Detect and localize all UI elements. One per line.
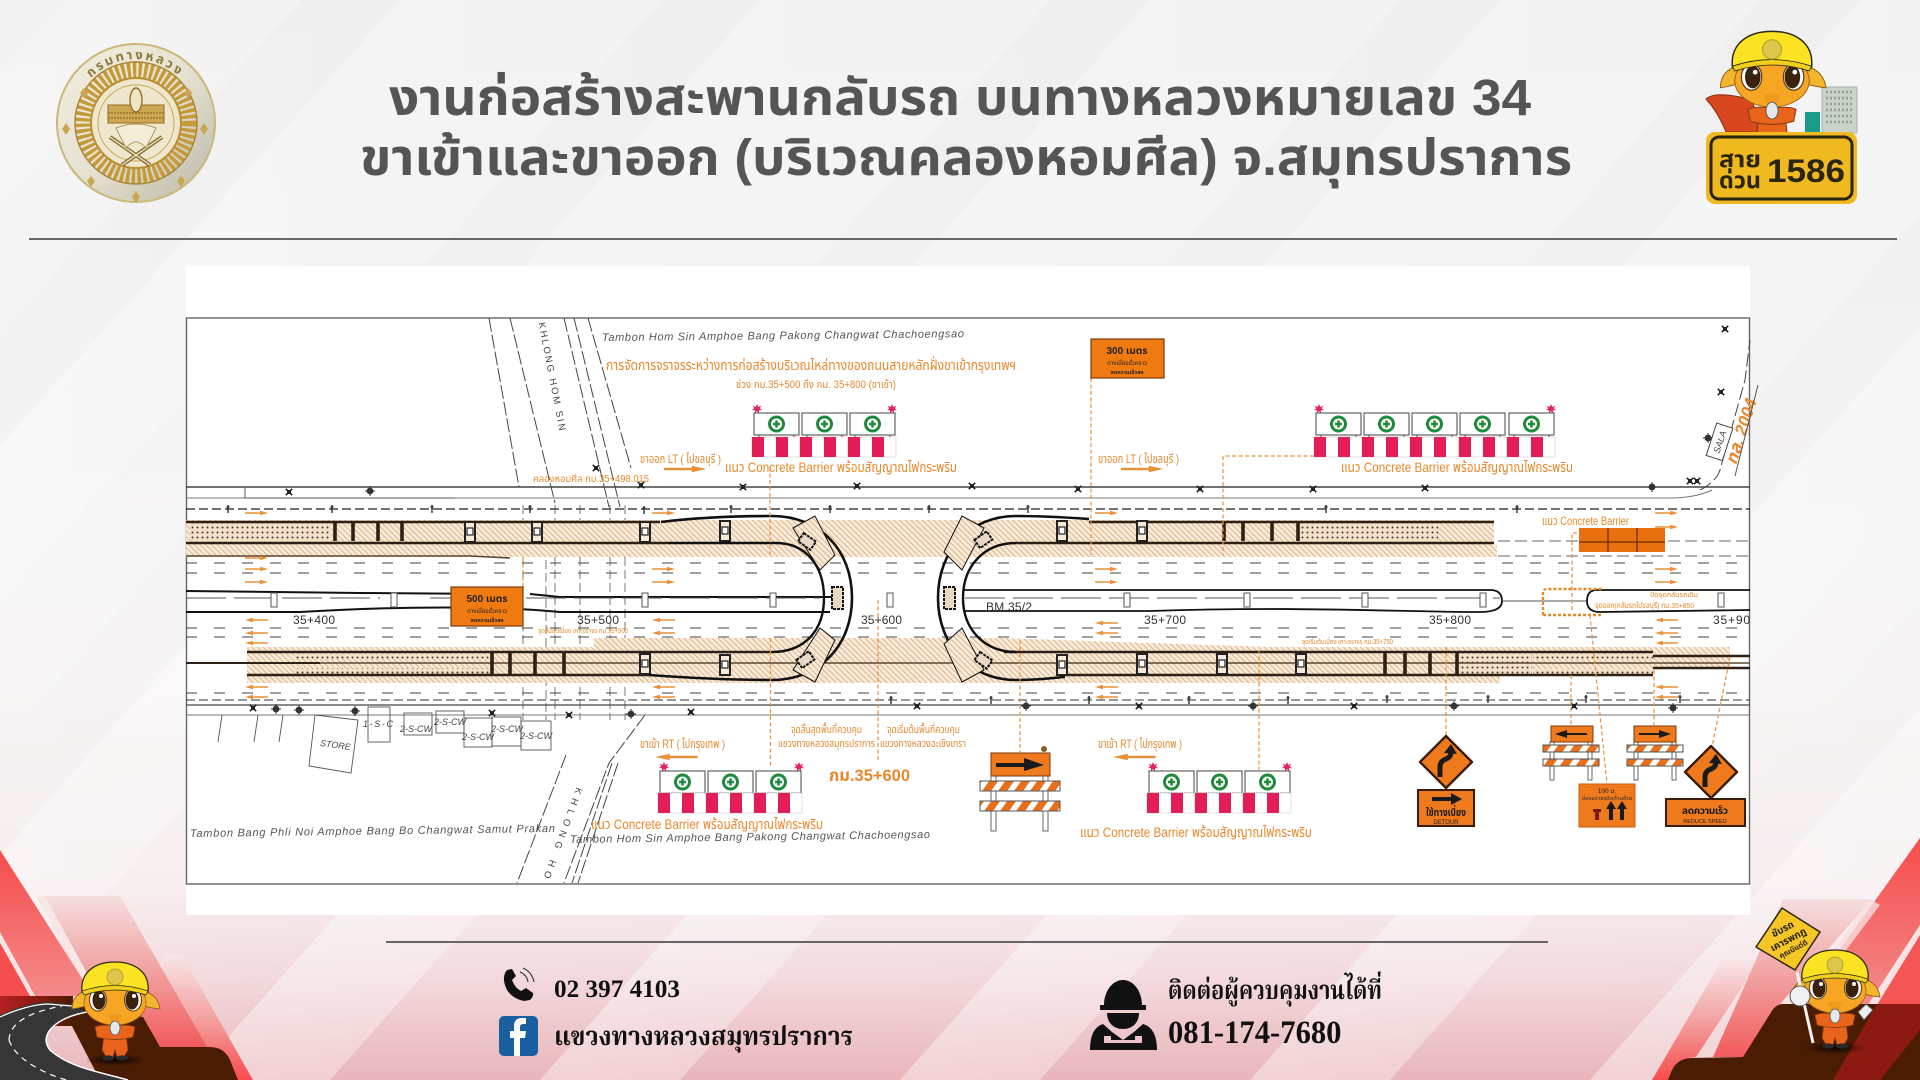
plan labels: 35+600: [861, 613, 902, 627]
SALA and route 2004 label: [1706, 385, 1761, 476]
concrete barrier group D: [1147, 762, 1292, 813]
hotline logo with mascot: สาย: [1719, 146, 1761, 172]
traffic direction arrows: [245, 511, 1678, 699]
sign: 100 m lane closed: ช่องจราจรปิดด้านซ้าย: [1582, 795, 1632, 802]
plan labels: ขาเข้า RT ( ไปกรุงเทพ ): [1098, 737, 1182, 751]
plan labels: การจัดการจราจรระหว่างการก่อสร้างบริเวณไหล่ทางของถนนสายหลักฝั่งขาเข้ากรุงเทพฯ: [606, 356, 1016, 374]
buildings south of road: [218, 707, 554, 773]
plan labels: จุดเริ่มต้นเบี่ยง เกาะจราจร กม.35+750: [1302, 636, 1393, 647]
title: งานก่อสร้างสะพานกลับรถ บนทางหลวงหมายเลข 34: [389, 69, 1532, 126]
upper roadway lines: [186, 340, 1750, 715]
sign: 100 m lane closed: 100 ม.: [1598, 788, 1616, 795]
center median with U-turn curves: [186, 516, 1750, 682]
emblem: Department of Highways seal: กรมทางหลวง: [88, 52, 182, 78]
plan labels: Tambon Hom Sin Amphoe Bang Pakong Changwat Chachoengsao: [602, 328, 964, 344]
plan labels: จุดสิ้นสุดเบี่ยง เกาะจราจร กม.35+500: [538, 625, 628, 636]
plan labels: แนว Concrete Barrier พร้อมสัญญาณไฟกระพริบ: [591, 816, 823, 832]
plan labels: 35+700: [1144, 613, 1186, 627]
hotline logo with mascot: [1706, 31, 1857, 204]
plan labels: KHLONG HOM SIN: [536, 321, 567, 432]
sign: 300 metres: ลดความเร็วลง: [1110, 369, 1144, 376]
icon: facebook: [499, 1016, 538, 1056]
plan labels: 35+500: [577, 613, 619, 627]
facebook page name: แขวงทางหลวงสมุทรปราการ: [554, 1022, 853, 1054]
icon: telephone: [504, 968, 534, 1001]
panel: road plan drawing: [186, 266, 1761, 915]
plan labels: แขวงทางหลวงสมุทรปราการ: [778, 738, 875, 750]
buildings south of road: STORE: [319, 738, 352, 752]
sign: 500 metres: ลดความเร็วลง: [470, 617, 504, 624]
plan labels: แนว Concrete Barrier พร้อมสัญญาณไฟกระพริบ: [725, 459, 957, 475]
sign: 100 m lane closed: [1579, 784, 1635, 827]
concrete barrier group B: [1314, 404, 1556, 457]
phone number: 02 397 4103: [554, 976, 680, 1003]
plan labels: แนว Concrete Barrier พร้อมสัญญาณไฟกระพริบ: [1080, 824, 1312, 840]
sign: reduce speed: [1666, 746, 1745, 826]
sign: detour: [1418, 736, 1474, 826]
plan labels: ขาออก LT ( ไปชลบุรี ): [1098, 452, 1179, 466]
title: [360, 69, 1572, 188]
plan labels: 35+400: [293, 613, 335, 627]
plan labels: ปิดจุดกลับรถเดิม: [1649, 591, 1698, 600]
right corner decoration: [1652, 838, 1920, 1080]
sign: 500 metres: 500 เมตร: [466, 594, 508, 605]
plan labels: ขาเข้า RT ( ไปกรุงเทพ ): [640, 737, 725, 751]
plan labels: 35+90: [1713, 613, 1750, 627]
plan labels: แนว Concrete Barrier: [1542, 514, 1629, 528]
sign: 500 metres: ทางเบี่ยงชั่วคราว: [467, 606, 507, 615]
mascot right with sign: คุณมีแต่ดี: [1778, 938, 1810, 961]
mascot right with sign: เคารพกฎ: [1769, 926, 1809, 954]
sign: reduce speed: REDUCE SPEED: [1683, 819, 1727, 825]
plan labels: ช่วง กม.35+500 ถึง กม. 35+800 (ขาเข้า): [736, 378, 896, 391]
plan labels: Tambon Bang Phli Noi Amphoe Bang Bo Changwat Samut Prakan: [190, 823, 555, 840]
header rule: [29, 238, 1897, 240]
buildings south of road: 2-S-CW: [519, 731, 554, 741]
hotline logo with mascot: 1586: [1767, 153, 1845, 189]
supervisor contact label: ติดต่อผู้ควบคุมงานได้ที่: [1168, 971, 1382, 1008]
mascot right with sign: ขับรถ: [1770, 918, 1796, 940]
plan labels: จุดสิ้นสุดพื้นที่ควบคุม: [791, 722, 862, 736]
left corner decoration with road: [0, 850, 253, 1080]
plan labels: แขวงทางหลวงฉะเชิงเทรา: [880, 738, 966, 750]
hotline logo with mascot: ด่วน: [1719, 167, 1761, 193]
barricade with arrow, large: [980, 746, 1060, 831]
sign: reduce speed: ลดความเร็ว: [1682, 805, 1728, 817]
barricade right arrow: [1627, 726, 1683, 780]
title: ขาเข้าและขาออก (บริเวณคลองหอมศีล) จ.สมุทรปราการ: [360, 129, 1572, 188]
sign: detour: DETOUR: [1433, 820, 1459, 826]
U-turn closure dashed box: [1543, 589, 1602, 615]
barricade left arrow: [1543, 726, 1599, 780]
plan labels: 35+800: [1429, 613, 1471, 627]
plan labels: จุดออก(กลับรถไปชลบุรี) กม.35+850: [1595, 601, 1694, 611]
sign: 300 metres: ทางเบี่ยงชั่วคราว: [1107, 358, 1147, 367]
buildings south of road: 2-S-CW: [399, 724, 434, 734]
SALA and route 2004 label: ทล. 2004: [1722, 395, 1761, 467]
utility poles and markers: [227, 326, 1728, 719]
plan labels: กม.35+600: [829, 766, 910, 785]
plan labels: BM.35/2: [986, 600, 1032, 614]
plan labels: Tambon Hom Sin Amphoe Bang Pakong Changwat Chachoengsao: [570, 829, 930, 846]
icon: site supervisor: [1090, 980, 1157, 1050]
plan labels: KHLONG HO: [541, 786, 584, 880]
plan labels: ขาออก LT ( ไปชลบุรี ): [640, 452, 721, 466]
orange leader lines: [523, 378, 1730, 784]
plan labels: แนว Concrete Barrier พร้อมสัญญาณไฟกระพริบ: [1341, 459, 1573, 475]
buildings south of road: 2-S-CW: [461, 732, 496, 742]
concrete barrier group A: [752, 404, 897, 457]
hatched median bands: [186, 520, 1750, 683]
emblem: Department of Highways seal: [56, 43, 216, 203]
plan labels: จุดเริ่มต้นพื้นที่ควบคุม: [887, 722, 960, 736]
buildings south of road: 2-S-CW: [490, 724, 524, 734]
canal crossing lines: [489, 318, 645, 883]
buildings south of road: 1-S-C: [363, 719, 394, 729]
plan labels: คลองหอมศีล กม.35+498.015: [533, 473, 649, 485]
sign: 300 metres: 300 เมตร: [1106, 346, 1148, 357]
supervisor phone number: 081-174-7680: [1168, 1015, 1342, 1051]
SALA and route 2004 label: SALA: [1712, 430, 1728, 454]
footer rule: [386, 941, 1548, 943]
sign: 500 metres: [451, 587, 523, 626]
buildings south of road: 2-S-CW: [433, 717, 468, 727]
sign: 300 metres: [1091, 339, 1164, 378]
mascot right with sign: [1756, 908, 1880, 1054]
mascot left: [72, 962, 160, 1066]
plan labels: [190, 321, 1750, 880]
concrete barrier block: [1579, 528, 1665, 552]
sign: detour: ใช้ทางเบี่ยง: [1426, 804, 1466, 819]
concrete barrier group C: [658, 762, 804, 813]
